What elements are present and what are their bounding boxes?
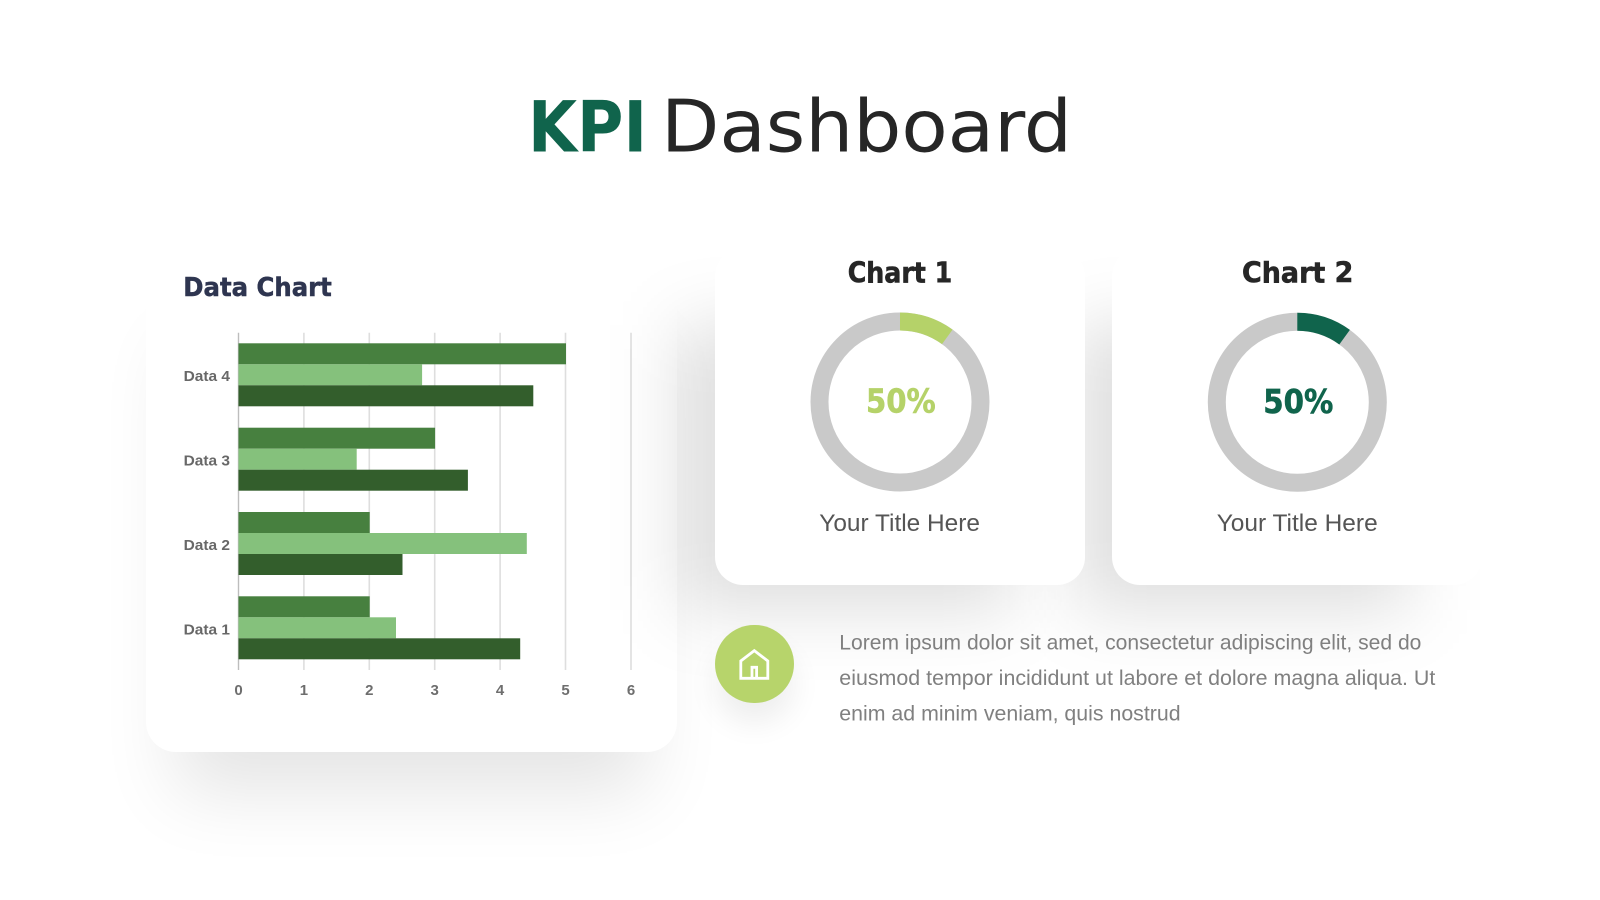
heading: Data Chart: Data Chart (183, 273, 332, 303)
category axis labels (184, 368, 231, 638)
heading: Chart 2: Chart 2 (1242, 256, 1353, 290)
panel: data chart card (146, 245, 677, 752)
caption: chart 2: Your Title Here (1217, 510, 1378, 537)
category axis labels: Data 4 (184, 368, 231, 385)
category axis labels: Data 1 (184, 621, 230, 638)
value axis labels: 4 (496, 682, 505, 699)
heading: Chart 1: Chart 1 (848, 256, 952, 290)
caption: chart 1: Your Title Here (819, 510, 980, 537)
category axis labels: Data 2 (184, 537, 230, 554)
donut chart 1 (820, 322, 980, 482)
value axis labels (234, 682, 635, 699)
text block: description: enim ad minim veniam, quis nostrud (839, 703, 1181, 726)
bars: Data 2 (238, 512, 527, 575)
value axis labels: 5 (561, 682, 570, 699)
donut chart 2 (1217, 322, 1378, 483)
panel: chart 2 card (1112, 248, 1482, 585)
value axis labels: 1 (300, 682, 308, 699)
text block: description: Lorem ipsum dolor sit amet, consectetur adipiscing elit, sed do (839, 631, 1421, 654)
text block: description (839, 631, 1436, 726)
value axis labels: 0 (234, 682, 243, 699)
text block: description: eiusmod tempor incididunt ut labore et dolore magna aliqua. Ut (839, 667, 1435, 690)
donut chart 2: 50% (1263, 383, 1333, 421)
bars: Data 4 (238, 343, 566, 406)
bar chart (184, 333, 635, 699)
value axis labels: 3 (431, 682, 439, 699)
value axis labels: 2 (365, 682, 373, 699)
bars: Data 3 (238, 428, 468, 491)
category axis labels: Data 3 (184, 452, 230, 470)
value axis labels: 6 (627, 682, 635, 699)
bars: Data 1 (238, 596, 520, 659)
donut chart 1: 50% (866, 383, 936, 421)
icon: home badge (715, 625, 794, 703)
panel: chart 1 card (715, 248, 1085, 585)
